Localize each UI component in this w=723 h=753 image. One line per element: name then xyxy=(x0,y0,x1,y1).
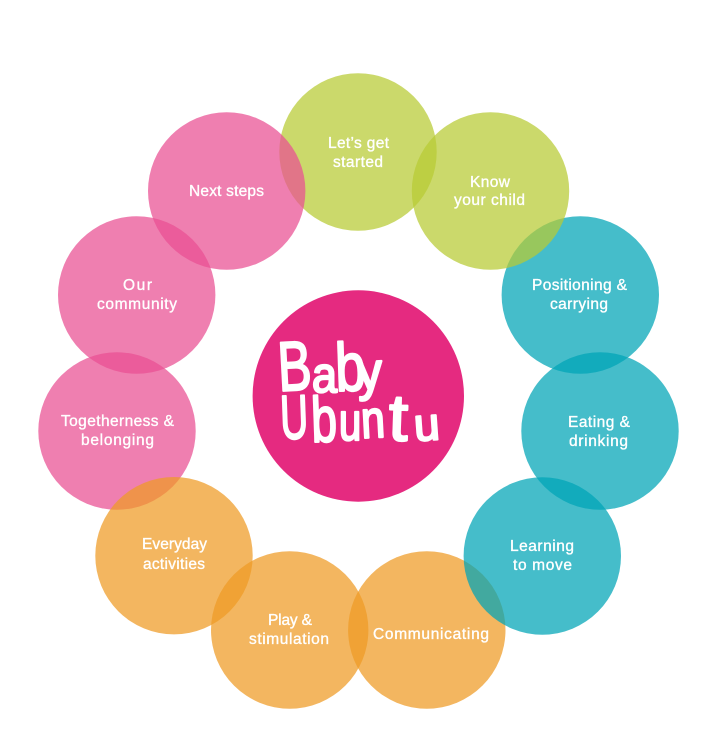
circle: Learning to move: to move xyxy=(513,557,572,574)
center circle: Baby Ubuntu xyxy=(253,290,464,502)
circle: Eating & drinking xyxy=(521,352,679,510)
logo: Baby Ubuntu handwritten wordmark: u xyxy=(412,397,441,451)
circle: Everyday activities: Everyday xyxy=(142,536,207,553)
logo: Baby Ubuntu handwritten wordmark: a xyxy=(312,348,338,404)
logo: Baby Ubuntu handwritten wordmark: B xyxy=(276,326,313,406)
circle: Communicating: Communicating xyxy=(373,626,489,643)
circle: Eating & drinking: Eating & xyxy=(568,414,631,431)
circle: Next steps: Next steps xyxy=(189,183,264,200)
circle: Play & stimulation: stimulation xyxy=(249,631,329,648)
logo: Baby Ubuntu handwritten wordmark: t xyxy=(387,382,409,455)
circle: Togetherness & belonging: Togetherness & xyxy=(61,413,175,430)
circle: Positioning & carrying xyxy=(502,216,659,374)
circle: Eating & drinking: drinking xyxy=(569,433,628,450)
logo: Baby Ubuntu handwritten wordmark: y xyxy=(356,342,384,401)
logo: Baby Ubuntu handwritten wordmark: u xyxy=(339,393,361,451)
circle: Let's get started: Let’s get xyxy=(328,135,390,152)
circle: Positioning & carrying: Positioning & xyxy=(532,277,628,294)
circle: Let's get started xyxy=(279,73,437,231)
circle: Togetherness & belonging xyxy=(38,352,196,510)
circle: Know your child: your child xyxy=(454,192,525,209)
circle: Play & stimulation: Play & xyxy=(268,612,313,629)
circle: Communicating xyxy=(348,551,505,709)
logo: Baby Ubuntu handwritten wordmark: b xyxy=(334,329,367,406)
circle: Togetherness & belonging: belonging xyxy=(81,432,154,449)
circle: Everyday activities: activities xyxy=(143,556,205,573)
circle: Next steps xyxy=(148,112,305,270)
circle: Our community: community xyxy=(97,296,177,313)
circle: Everyday activities xyxy=(95,477,253,634)
circle: Play & stimulation xyxy=(211,551,368,709)
circle: Learning to move xyxy=(464,477,621,635)
logo: Baby Ubuntu handwritten wordmark: U xyxy=(279,382,309,452)
circle: Know your child xyxy=(412,112,569,270)
circle: Let's get started: started xyxy=(333,154,383,171)
logo: Baby Ubuntu handwritten wordmark xyxy=(276,326,441,456)
circle: Our community: Our xyxy=(123,277,152,294)
logo: Baby Ubuntu handwritten wordmark: n xyxy=(360,391,386,450)
circle: Learning to move: Learning xyxy=(510,538,574,555)
circle: Positioning & carrying: carrying xyxy=(550,296,608,313)
circle: Our community xyxy=(58,216,215,374)
logo: Baby Ubuntu handwritten wordmark: b xyxy=(310,384,338,456)
circle: Know your child: Know xyxy=(470,174,511,191)
